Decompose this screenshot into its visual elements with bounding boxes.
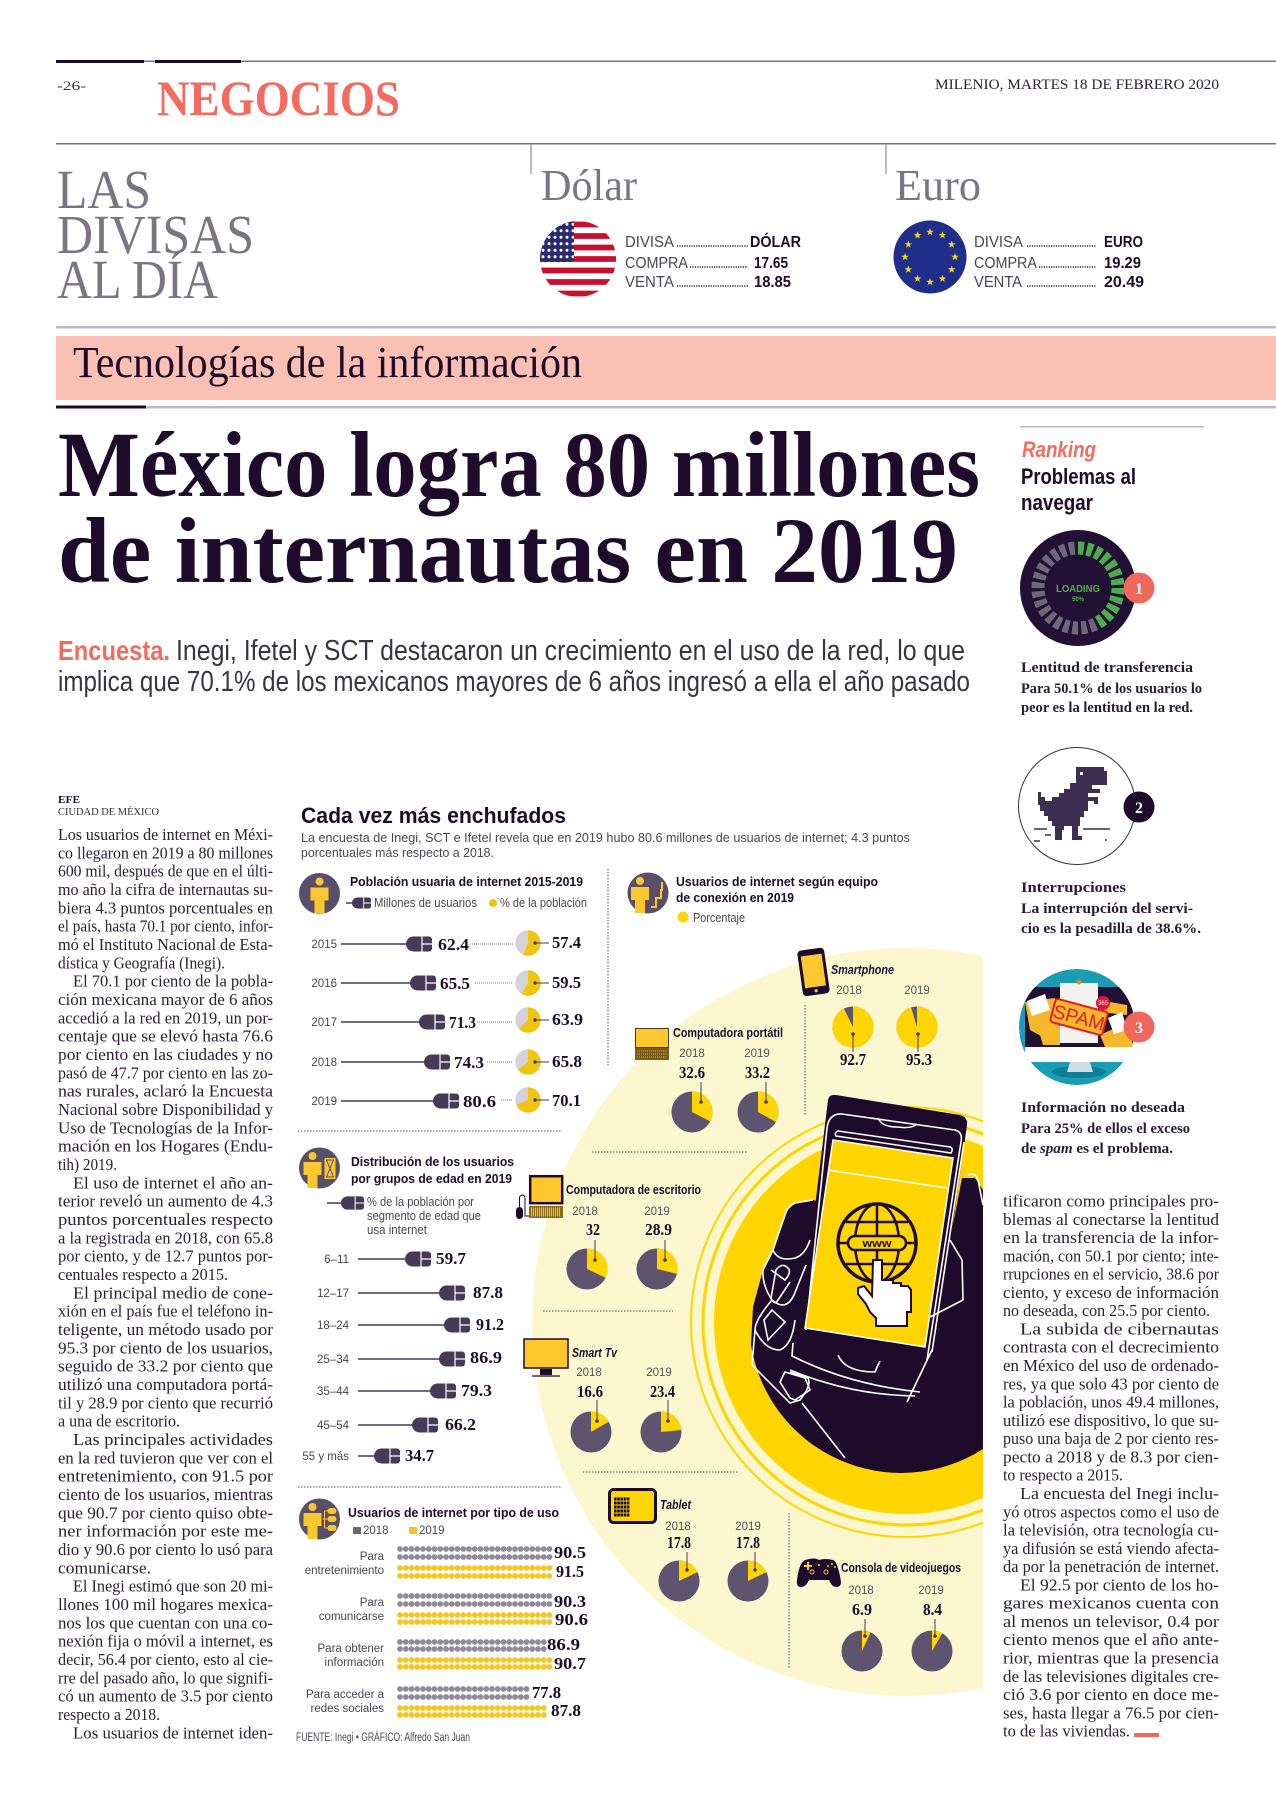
chart: consola de videojuegos xyxy=(797,1558,961,1672)
item 2 text: cio es la pesadilla de 38.6%. xyxy=(1021,921,1201,937)
rates table: EURO xyxy=(1104,234,1143,251)
item 2 text xyxy=(1021,880,1201,937)
text block: left column article: Los usuarios de internet iden- xyxy=(73,1723,273,1742)
text block: left column article: dio y 90.6 por ciento lo usó para xyxy=(58,1540,274,1559)
heading: las divisas al día: DIVISAS xyxy=(57,204,254,265)
chart: consola de videojuegos: 6.9 xyxy=(852,1600,872,1619)
infographic title: porcentuales más respecto a 2018. xyxy=(301,845,494,860)
chart: computadora portátil: 2019 xyxy=(744,1048,770,1060)
text block: right column article: ció 3.6 por ciento en doce me- xyxy=(1003,1685,1219,1704)
age bars: 34.7 xyxy=(405,1446,434,1465)
text block: left column article: entretenimiento, con 91.5 por xyxy=(58,1467,274,1486)
chart row 2017: 63.9 xyxy=(552,1010,583,1029)
ranking heading: Problemas al xyxy=(1021,464,1136,489)
rates table: VENTA xyxy=(974,274,1022,291)
dot bar values: 90.3 xyxy=(554,1592,586,1611)
deck: encuesta: Inegi, Ifetel y SCT destacaron un crecimiento en el uso de la red, lo que xyxy=(176,635,965,667)
item 1 text: Para 50.1% de los usuarios lo xyxy=(1021,681,1202,697)
text block: left column article: llones 100 mil hogares mexica- xyxy=(58,1595,273,1614)
infographic intro: La encuesta de Inegi, SCT e Ifetel revela que en 2019 hubo 80.6 millones de usuarios de internet; 4.3 puntos xyxy=(301,830,910,845)
item 1 text xyxy=(1021,660,1202,716)
chart row 2018: 65.8 xyxy=(552,1052,582,1071)
text block: left column article: nos los que cuentan con una co- xyxy=(58,1613,273,1632)
age bars: 91.2 xyxy=(476,1315,504,1334)
item 3 text: de spam es el problema. xyxy=(1021,1141,1173,1157)
age bars: 25–34 xyxy=(317,1354,350,1366)
text block: right column article: La subida de cibernautas xyxy=(1020,1320,1219,1338)
chart: smartphone: 2018 xyxy=(836,985,862,997)
text block: right column article: to respecto a 2015. xyxy=(1003,1466,1123,1485)
section band: tecnologías de la información: Tecnologías de la información xyxy=(73,338,582,387)
age bars: 66.2 xyxy=(445,1415,476,1434)
text block: right column article: de las televisiones digitales cre- xyxy=(1003,1667,1219,1686)
section band: tecnologías de la información xyxy=(56,326,1276,408)
item 1 text: Lentitud de transferencia xyxy=(1021,660,1194,676)
text block: left column article: por ciento, y de 12.7 puntos por- xyxy=(58,1247,273,1266)
icon: spam xyxy=(1019,969,1135,1085)
text block: right column article: ciento menos que el año ante- xyxy=(1003,1630,1219,1649)
chart row 2018 xyxy=(311,1049,582,1075)
icon: loading: 50% xyxy=(1072,597,1085,603)
icon: www globe xyxy=(838,1204,916,1282)
rates table: DÓLAR xyxy=(750,232,801,251)
icon: desktop computer xyxy=(516,1176,563,1219)
text block: right column article: utilizó ese dispositivo, lo que su- xyxy=(1003,1411,1219,1430)
chart: tablet: 2018 xyxy=(665,1521,691,1533)
text block: left column article: que 90.7 por ciento quiso obte- xyxy=(58,1503,273,1522)
text block: left column article: terior reveló un aumento de 4.3 xyxy=(58,1192,273,1211)
age bars: 45–54 xyxy=(317,1420,350,1432)
icon: spam: SPAM xyxy=(1051,1002,1107,1035)
text block: left column article: nexión fija o móvil a internet, es xyxy=(58,1632,273,1651)
section title: Distribución de los usuarios xyxy=(351,1154,514,1169)
text block: right column article: no deseada, con 25.5 por ciento. xyxy=(1003,1301,1210,1320)
icon: gamepad xyxy=(797,1558,841,1587)
text block: right column article: pecto a 2018 y de 8.3 por cien- xyxy=(1003,1447,1219,1466)
badge 2: 2 xyxy=(1135,800,1143,817)
age bars: 12–17 xyxy=(317,1288,349,1300)
text block: left column article xyxy=(58,825,274,1742)
chart: computadora de escritorio: 28.9 xyxy=(645,1220,672,1239)
text block: left column article: respecto a 2018. xyxy=(58,1705,160,1724)
age bars: 35–44 xyxy=(317,1386,350,1398)
rates table: VENTA xyxy=(625,274,674,291)
text block: right column article: mación, con 50.1 por ciento; inte- xyxy=(1003,1246,1219,1265)
dot bar values: 77.8 xyxy=(532,1683,561,1702)
rates table: 20.49 xyxy=(1104,274,1144,291)
deck: encuesta xyxy=(58,635,970,698)
text block: left column article: nas rurales, aclaró la Encuesta xyxy=(58,1082,274,1101)
text block: left column article: ción mexicana mayor de 6 años xyxy=(58,990,273,1009)
masthead: page header xyxy=(56,60,1276,174)
item 3 text xyxy=(1021,1100,1190,1157)
age bars: 79.3 xyxy=(461,1381,492,1400)
text block: right column article: El 92.5 por ciento de los ho- xyxy=(1020,1575,1219,1594)
chart: smartphone: 95.3 xyxy=(906,1050,932,1069)
text block: left column article: accedió a la red en 2019, un por- xyxy=(58,1008,273,1027)
icon: EU flag xyxy=(894,220,966,294)
dot bar labels: Para acceder a xyxy=(306,1689,385,1701)
text block: right column article: yó otros aspectos como el uso de xyxy=(1003,1502,1219,1521)
heading: las divisas al día: AL DÍA xyxy=(57,249,218,310)
rates table: 17.65 xyxy=(754,255,788,272)
main headline: México logra 80 millones xyxy=(58,414,980,517)
age bars: 18–24 xyxy=(317,1320,350,1332)
text block: left column article: centaje que se elevó hasta 76.6 xyxy=(58,1027,273,1046)
byline xyxy=(58,795,159,818)
text block: left column article: có un aumento de 3.5 por ciento xyxy=(58,1687,273,1706)
panel: distribución por edad xyxy=(299,1148,514,1465)
chart: computadora de escritorio: 2019 xyxy=(644,1206,670,1218)
icon: www globe: www xyxy=(861,1238,892,1250)
text block: left column article: Nacional sobre Disponibilidad y xyxy=(58,1100,274,1119)
icon: loading: LOADING xyxy=(1056,584,1100,595)
text block: left column article: 600 mil, después de que en el últi- xyxy=(58,862,273,881)
chart row 2017 xyxy=(311,1007,583,1033)
chart row 2019: 80.6 xyxy=(463,1092,496,1111)
text block: left column article: el país, hasta 70.1 por ciento, infor- xyxy=(58,917,273,936)
text block: left column article: El 70.1 por ciento de la pobla- xyxy=(73,972,273,991)
text block: right column article xyxy=(1003,1192,1220,1741)
chart: smartphone: 92.7 xyxy=(840,1050,866,1069)
text block: left column article: teligente, un método usado por xyxy=(58,1320,274,1339)
main headline: de internautas en 2019 xyxy=(58,500,958,603)
section title xyxy=(676,874,878,905)
text block: left column article: seguido de 33.2 por ciento que xyxy=(58,1357,273,1376)
chart: tablet: 2019 xyxy=(735,1521,761,1533)
icon: pointer hand xyxy=(858,1260,911,1326)
dot bar values xyxy=(532,1543,588,1720)
text block: left column article: 95.3 por ciento de los usuarios, xyxy=(58,1338,273,1357)
source: FUENTE: Inegi • GRÁFICO: Alfredo San Juan xyxy=(296,1731,470,1744)
text block: right column article: res, ya que solo 43 por ciento de xyxy=(1003,1374,1219,1393)
section title: Usuarios de internet según equipo xyxy=(676,874,878,889)
text block: right column article: ya difusión se está viendo afecta- xyxy=(1003,1539,1219,1558)
text block: left column article: El principal medio de cone- xyxy=(73,1283,273,1302)
dot bar values: 90.5 xyxy=(554,1543,586,1562)
heading: las divisas al día: LAS xyxy=(57,159,151,220)
icon: tablet xyxy=(610,1490,656,1522)
panel: equipo de conexión heading xyxy=(628,872,878,925)
text block: left column article: Los usuarios de internet en Méxi- xyxy=(58,825,273,844)
dot bar values: 90.6 xyxy=(555,1610,588,1629)
dot bar labels: entretenimiento xyxy=(305,1565,384,1577)
text block: right column article: ciento, y exceso de información xyxy=(1003,1283,1219,1302)
chart: smart tv: 2018 xyxy=(576,1367,602,1379)
chart row 2015: 62.4 xyxy=(438,935,470,954)
chart: smart tv: 23.4 xyxy=(650,1382,675,1401)
chart: computadora de escritorio: 32 xyxy=(586,1220,600,1239)
legend: Millones de usuarios xyxy=(374,896,477,910)
text block: left column article: mó el Instituto Nacional de Esta- xyxy=(58,935,273,954)
chart row 2016: 2016 xyxy=(311,978,337,990)
text block: right column article: tificaron como principales pro- xyxy=(1003,1192,1219,1210)
chart: smart tv: 2019 xyxy=(646,1367,672,1379)
text block: right column article: rior, mientras que la presencia xyxy=(1003,1648,1220,1668)
chart: computadora de escritorio: Computadora de escritorio xyxy=(566,1182,701,1197)
legend xyxy=(346,896,587,910)
chart: smartphone: Smartphone xyxy=(831,963,894,977)
legend: segmento de edad que xyxy=(367,1209,481,1223)
dot bars xyxy=(400,1549,553,1715)
text block: right column article: en la transferencia de la infor- xyxy=(1003,1228,1219,1247)
dividers xyxy=(298,869,805,1668)
legend: Porcentaje xyxy=(693,911,745,925)
chart row 2016 xyxy=(311,970,581,996)
text block: right column article: to de las viviendas. xyxy=(1003,1722,1130,1741)
dot bar values: 87.8 xyxy=(551,1701,581,1720)
section title: Usuarios de internet por tipo de uso xyxy=(348,1505,559,1520)
dot bar labels: información xyxy=(325,1657,384,1669)
rates table: DIVISA xyxy=(974,234,1023,251)
dot bar values: 90.7 xyxy=(554,1654,587,1673)
icon: person with steps xyxy=(628,872,668,914)
panel: ranking xyxy=(1018,426,1204,1157)
chart: tablet: 17.8 xyxy=(667,1533,691,1552)
badge 1: 1 xyxy=(1135,581,1143,598)
chart: consola de videojuegos: Consola de videojuegos xyxy=(841,1560,961,1575)
chart: computadora portátil: 32.6 xyxy=(679,1063,705,1082)
icon: dinosaur xyxy=(1018,748,1136,864)
infographic title xyxy=(301,803,910,860)
badge 2 xyxy=(1124,792,1154,822)
chart row 2019: 2019 xyxy=(311,1096,337,1108)
badge 3: 3 xyxy=(1135,1020,1143,1037)
text block: left column article: dística y Geografía (Inegi). xyxy=(58,953,225,972)
heading: las divisas al día xyxy=(57,159,254,310)
text block: left column article: xión en el país fue el teléfono in- xyxy=(58,1302,273,1321)
chart row 2019: 70.1 xyxy=(552,1091,581,1110)
item 1 text: peor es la lentitud en la red. xyxy=(1021,700,1193,716)
item 3 text: Para 25% de ellos el exceso xyxy=(1021,1121,1190,1137)
chart: computadora portátil: 2018 xyxy=(679,1048,705,1060)
main headline xyxy=(58,414,980,603)
panel: tipo de uso xyxy=(296,1498,588,1744)
section title: Población usuaria de internet 2015-2019 xyxy=(350,874,583,889)
illustration: hand holding phone on yellow circles xyxy=(532,948,983,1696)
text block: left column article: ner información por este me- xyxy=(58,1522,273,1541)
rates table: DIVISA xyxy=(625,234,674,251)
icon: person xyxy=(299,873,340,914)
text block: left column article: decir, 56.4 por ciento, esto al cie- xyxy=(58,1650,273,1669)
chart: consola de videojuegos: 8.4 xyxy=(923,1600,942,1619)
rates table: COMPRA xyxy=(974,255,1037,272)
chart: consola de videojuegos: 2019 xyxy=(918,1585,944,1597)
icon: smartphone xyxy=(797,947,830,997)
legend xyxy=(327,1195,481,1237)
text block: left column article: co llegaron en 2019 a 80 millones xyxy=(58,843,273,862)
dot bar values: 86.9 xyxy=(547,1635,580,1654)
deck: encuesta: Encuesta. xyxy=(58,635,170,666)
chart: smart tv: Smart Tv xyxy=(572,1346,618,1360)
text block: left column article: centuales respecto a 2015. xyxy=(58,1265,228,1284)
text block: left column article: a una de escritorio. xyxy=(58,1412,180,1431)
dot bar labels: Para xyxy=(360,1597,385,1609)
chart row 2017: 71.3 xyxy=(449,1013,476,1032)
text block: right column article: blemas al conectarse la lentitud xyxy=(1003,1210,1220,1229)
legend xyxy=(678,911,745,925)
dot bar values: 91.5 xyxy=(556,1562,584,1581)
text block: left column article: ciento de los usuarios, mientras xyxy=(58,1485,273,1504)
text block: left column article: tih) 2019. xyxy=(58,1155,117,1174)
rates table xyxy=(974,234,1144,291)
legend xyxy=(353,1525,445,1537)
chart row 2016: 59.5 xyxy=(552,973,581,992)
legend: 2019 xyxy=(419,1525,445,1537)
page number: -26- xyxy=(57,78,86,93)
text block: right column article: La encuesta del Inegi inclu- xyxy=(1020,1484,1219,1503)
dot bar labels: Para obtener xyxy=(318,1643,384,1655)
text block: left column article: en la red tuvieron que ver con el xyxy=(58,1448,273,1467)
text block: left column article: pasó de 47.7 por ciento en las zo- xyxy=(58,1063,273,1082)
age bars: 59.7 xyxy=(436,1249,467,1268)
rates table: 18.85 xyxy=(754,274,791,291)
panel: euro xyxy=(894,161,1144,294)
text block: left column article: Uso de Tecnologías de la Infor- xyxy=(58,1118,273,1137)
text block: right column article: ses, hasta llegar a 76.5 por cien- xyxy=(1003,1703,1219,1722)
chart row 2016: 65.5 xyxy=(440,974,470,993)
heading: euro: Euro xyxy=(895,161,981,210)
text block: right column article: puso una baja de 2 por ciento res- xyxy=(1003,1429,1219,1448)
text block: left column article: til y 28.9 por ciento que recurrió xyxy=(58,1393,273,1412)
byline: EFE xyxy=(58,795,80,806)
chart row 2019 xyxy=(311,1087,581,1113)
text block: left column article: por ciento en las ciudades y no xyxy=(58,1045,273,1064)
chart row 2018: 2018 xyxy=(311,1057,337,1069)
text block: left column article: El uso de internet el año an- xyxy=(73,1173,273,1192)
infographic title: Cada vez más enchufados xyxy=(301,803,566,828)
chart: computadora portátil xyxy=(635,1025,783,1132)
dot bar labels: redes sociales xyxy=(310,1703,384,1715)
chart row 2018: 74.3 xyxy=(454,1053,484,1072)
text block: left column article: mación en los Hogares (Endu- xyxy=(58,1137,273,1156)
ranking heading: Ranking xyxy=(1022,437,1096,462)
text block: left column article: a la registrada en 2018, con 65.8 xyxy=(58,1228,273,1247)
deck: encuesta: implica que 70.1% de los mexicanos mayores de 6 años ingresó a ella el año pasado xyxy=(58,666,970,698)
panel: población usuaria xyxy=(299,873,587,1113)
text block: right column article: al menos un televisor, 0.4 por xyxy=(1003,1612,1220,1631)
icon: person with nodes xyxy=(299,1498,340,1540)
chart: smartphone: 2019 xyxy=(904,985,930,997)
text block: right column article: la población, unos 49.4 millones, xyxy=(1003,1393,1219,1412)
item 3 text: Información no deseada xyxy=(1021,1100,1186,1116)
legend: usa internet xyxy=(367,1223,427,1237)
chart: smartphone xyxy=(797,947,938,1069)
ranking heading: navegar xyxy=(1021,490,1093,515)
icon: tv xyxy=(524,1339,568,1376)
date line: MILENIO, MARTES 18 DE FEBRERO 2020 xyxy=(935,77,1219,93)
chart: tablet: Tablet xyxy=(660,1498,692,1512)
age bars xyxy=(302,1249,504,1465)
dot bar labels: Para xyxy=(360,1551,385,1563)
chart row 2015: 57.4 xyxy=(552,933,581,952)
age bars: 6–11 xyxy=(324,1254,349,1266)
text block: left column article: biera 4.3 puntos porcentuales en xyxy=(58,898,273,917)
legend: % de la población xyxy=(500,896,587,910)
rates table xyxy=(625,232,801,291)
item 2 text: Interrupciones xyxy=(1021,880,1126,896)
age bars: 86.9 xyxy=(470,1348,502,1367)
section title xyxy=(351,1154,514,1186)
text block: left column article: Las principales actividades xyxy=(73,1430,273,1449)
chart row 2015: 2015 xyxy=(311,939,337,951)
text block: right column article: da por la penetración de internet. xyxy=(1003,1557,1219,1576)
chart row 2017: 2017 xyxy=(311,1017,337,1029)
text block: left column article: puntos porcentuales respecto xyxy=(58,1210,273,1229)
text block: left column article: rre del pasado año, lo que signifi- xyxy=(58,1668,273,1687)
byline: CIUDAD DE MÉXICO xyxy=(58,806,159,818)
text block: right column article: rrupciones en el servicio, 38.6 por xyxy=(1003,1265,1219,1284)
text block: right column article: la televisión, otra tecnología cu- xyxy=(1003,1520,1219,1540)
chart: tablet xyxy=(610,1490,768,1602)
text block: right column article: contrasta con el decrecimiento xyxy=(1003,1338,1219,1357)
section name: NEGOCIOS xyxy=(157,70,400,126)
rates table: COMPRA xyxy=(625,255,688,272)
chart row 2015 xyxy=(311,930,581,956)
text block: right column article: gares mexicanos cuenta con xyxy=(1003,1594,1219,1613)
text block: left column article: comunicarse. xyxy=(58,1558,151,1577)
dot bar labels: comunicarse xyxy=(319,1611,384,1623)
age bars: 87.8 xyxy=(473,1283,503,1302)
badge 1 xyxy=(1124,572,1154,604)
chart: computadora portátil: Computadora portátil xyxy=(673,1025,783,1040)
heading: dólar: Dólar xyxy=(541,161,637,210)
age bars: 55 y más xyxy=(302,1451,349,1463)
chart: computadora portátil: 33.2 xyxy=(745,1063,770,1082)
badge 3 xyxy=(1124,1012,1154,1042)
item 2 text: La interrupción del servi- xyxy=(1021,901,1193,917)
ranking heading xyxy=(1021,437,1136,515)
icon: person with hourglass xyxy=(299,1148,340,1188)
hand outlines xyxy=(752,1142,983,1458)
text block: left column article: utilizó una computadora portá- xyxy=(58,1375,273,1394)
chart: smart tv xyxy=(524,1339,682,1452)
icon: spam: 365 xyxy=(1098,1001,1109,1007)
text block: left column article: mo año la cifra de internautas su- xyxy=(58,880,273,899)
icon: laptop xyxy=(635,1028,669,1060)
chart: smart tv: 16.6 xyxy=(577,1382,603,1401)
icon: US flag xyxy=(540,221,616,297)
legend: % de la población por xyxy=(367,1195,474,1209)
text block: left column article: El Inegi estimó que son 20 mi- xyxy=(73,1577,273,1596)
dot bar labels xyxy=(305,1551,385,1715)
rates table: 19.29 xyxy=(1104,255,1141,272)
section title: de conexión en 2019 xyxy=(676,890,794,905)
legend: 2018 xyxy=(363,1525,389,1537)
icon: loading xyxy=(1020,530,1136,646)
section title: por grupos de edad en 2019 xyxy=(351,1171,512,1186)
chart: consola de videojuegos: 2018 xyxy=(848,1585,874,1597)
panel: dólar xyxy=(540,161,801,297)
chart: computadora de escritorio xyxy=(516,1176,701,1290)
chart: tablet: 17.8 xyxy=(736,1533,760,1552)
chart: computadora de escritorio: 2018 xyxy=(572,1206,598,1218)
text block: right column article: en México del uso de ordenado- xyxy=(1003,1356,1219,1375)
